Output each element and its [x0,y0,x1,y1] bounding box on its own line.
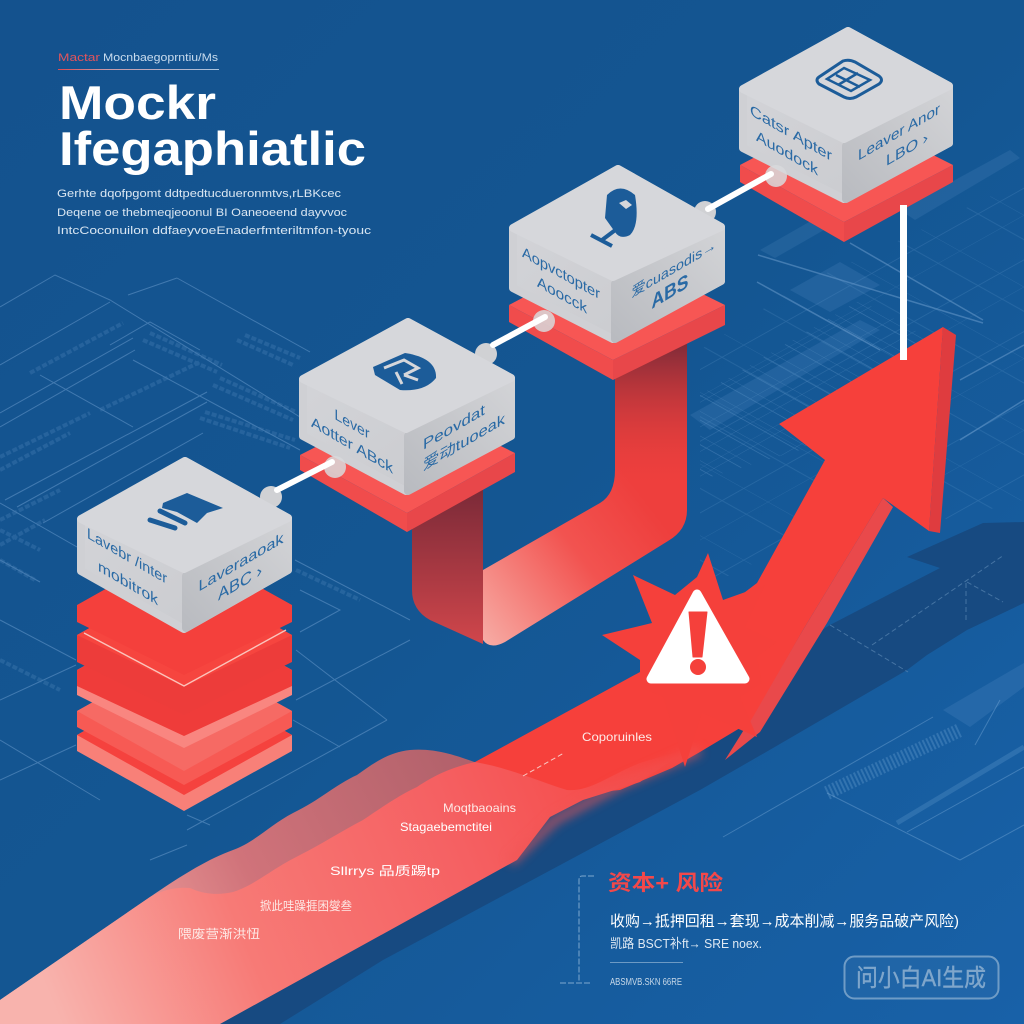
dashed leader [523,753,564,776]
warning triangle [651,594,745,679]
callout main line: 收购→抵押回租→套现→成本削减→服务品破产风险) [610,913,959,930]
block 4 right text: LBO › [886,129,928,170]
callout footnote: ABSMVB.SKN 66RE [610,977,682,988]
callout: capital and risk [608,871,959,988]
red plate under block 2 [300,400,515,532]
ribbon labels: Stagaebemctitei [400,820,492,834]
ribbon labels [178,730,652,941]
title: Mockr [59,76,216,129]
watermark: 问小白AI生成 [856,965,986,992]
ribbon labels: Moqtbaoains [443,801,516,815]
block 2 [303,322,511,491]
background blueprint: right [690,150,1024,590]
ribbon labels: 掀此哇躁捱困燮叁 [260,898,352,913]
blurred ribbon edge [510,750,700,862]
ribbon labels: Sllrrys 品质踢tp [330,864,440,878]
header: Ifegaphiatlic [59,122,366,175]
block 1 right text: Laveraaoak [198,529,284,595]
dashed bracket [560,876,594,983]
callout secondary line: 凯路 BSCT补ft→ SRE noex. [610,936,762,951]
block 2 connector nub [475,343,497,365]
ribbon labels: 隈废营渐洪忸 [178,926,260,941]
watermark [844,956,998,998]
intro text: Gerhte dqofpgomt ddtpedtucdueronmtvs,rLBKcec [57,188,342,200]
block 4 left text: Catsr Apter [750,102,833,165]
block 1 left text: Lavebr /inter [87,525,168,588]
ribbon top face [0,748,690,1024]
block 4 left text: Auodock [756,127,819,180]
block 4 icon [817,60,882,98]
red plate under block 3 [509,250,725,380]
block 1 right text: ABC › [218,560,262,604]
kicker rule [58,69,219,70]
block 2 left text: Aotter ABck [311,413,394,478]
block 2 icon [373,353,436,390]
connectors between blocks [277,174,771,490]
intro text: Deqene oe thebmeqjeoonul BI Oaneoeend dayvvoc [57,207,348,219]
block 1 icon [150,493,223,528]
vertical connector to arrow [900,205,907,360]
header: Mocnbaegoprntiu/Ms [103,52,219,64]
block 3 left text: Aopvctopter [522,244,601,303]
shadow dashed floor lines [830,555,1004,672]
arrow shaft side face [725,498,893,760]
block 1 [81,461,288,629]
block 4 right text: Leaver Anor [858,100,941,164]
block 3 right text: 爱cuasodis→ [632,236,716,301]
background blueprint: left [0,275,410,860]
block 2 right text: Peovdat [423,401,486,454]
warning burst [602,553,777,767]
ribbon shadow band [180,522,1024,1024]
block 3 [513,169,721,339]
block 1 connector nub [260,486,282,508]
block 2 lower connector socket [324,456,346,478]
block 3 icon [591,188,637,246]
intro text [57,188,372,237]
U-shaped ribbon [412,340,687,646]
ribbon folded back edge [0,750,480,1000]
burst star [602,553,777,767]
red plate under block 4 [740,110,953,242]
block 1 left text: mobitrok [98,558,159,610]
block 2 right text: 爱动tuoeak [423,410,506,474]
block 3 lower connector socket [533,310,555,332]
callout rule [610,962,683,963]
block 4 [743,31,949,199]
block 4 left text [750,102,833,180]
left column [412,490,483,644]
rising ribbon with arrow [0,327,956,1024]
red stacked layers under block 1 [77,545,292,811]
intro text: IntcCoconuilon ddfaeyvoeEnaderfmteriltmfon-tyouc [57,225,372,237]
ribbon labels: Coporuinles [582,730,652,744]
header [58,52,366,175]
block 2 left text: Lever [334,406,370,443]
callout heading: 资本+ 风险 [608,871,723,895]
exclamation mark [689,612,707,657]
right column shade [615,340,687,490]
block 4 lower connector socket [765,165,787,187]
arrow body [475,327,943,795]
arrow head side face [929,327,956,533]
background blueprint: lower right [723,663,1024,860]
block 3 right text: ABS [652,268,688,314]
bottom and right strip [483,340,687,646]
block 3 left text: Aoocck [537,273,588,318]
block 3 connector nub [694,201,716,223]
kicker text: Mactar [58,52,100,64]
